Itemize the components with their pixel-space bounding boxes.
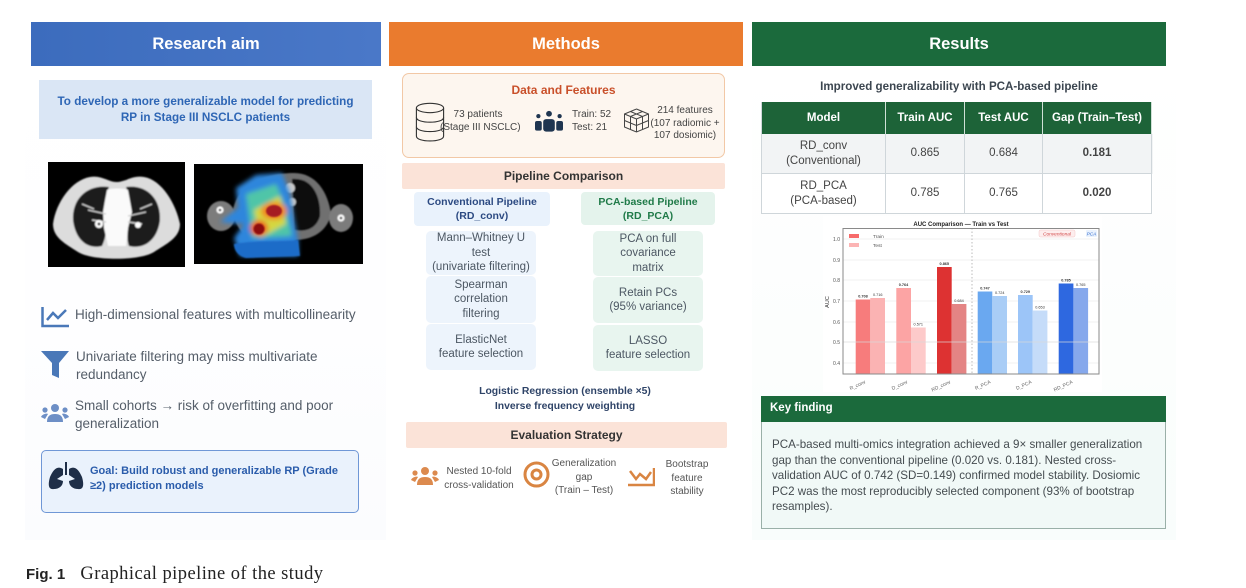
- key finding text: PCA-based multi-omics integration achieved a 9× smaller generalization gap than the conventional pipeline (0.020 vs. 0.181). Nested cross-validation AUC of 0.742 (SD=0.149) confirmed model stability. Dosiomic PC2 was the most reproducibly selected component (93% of bootstrap resamples).: [772, 438, 1142, 513]
- heading: results: Results: [929, 34, 989, 52]
- text: bootstrap stability: feature: [671, 472, 703, 484]
- table row: RD_PCA: 0.020: [1083, 187, 1111, 199]
- text: small cohorts: Small cohorts → risk of overfitting and poor generalization: [75, 398, 333, 431]
- icon: lungs: [48, 462, 84, 490]
- heading: research aim: [31, 22, 381, 66]
- bars: conventional models: [856, 267, 966, 374]
- data heading: Data and Features: [511, 83, 616, 97]
- heading: methods: Methods: [532, 34, 600, 52]
- panel: methods: [389, 22, 743, 497]
- classifier text: [479, 386, 651, 412]
- evaluation strategy heading: Evaluation Strategy: [510, 428, 623, 442]
- bars: PCA models: [978, 284, 1088, 374]
- x-axis labels: R_PCA: [974, 379, 992, 392]
- value labels: 0.571: [914, 322, 923, 326]
- chart legend: Train: [873, 234, 884, 240]
- step: ElasticNet: [426, 324, 536, 370]
- icon: funnel: [41, 351, 69, 378]
- text: nested CV: Nested 10-fold: [446, 466, 512, 477]
- conventional pipeline title: (RD_conv): [456, 210, 508, 222]
- patients count: (Stage III NSCLC): [440, 122, 521, 132]
- step: Spearman: filtering: [462, 308, 500, 320]
- table row: RD_PCA: 0.765: [989, 187, 1018, 199]
- patients count: 73 patients: [454, 109, 502, 120]
- patients count: [440, 109, 521, 132]
- y-axis labels: 0.7: [833, 299, 840, 305]
- table row: RD_conv: (Conventional): [786, 154, 861, 166]
- key finding heading: Key finding: [770, 402, 833, 414]
- text: univariate filtering: Univariate filtering may miss multivariate redundancy: [76, 349, 318, 382]
- table row: RD_conv: 0.684: [989, 147, 1018, 159]
- comparison table: [761, 102, 1152, 214]
- heading: research aim: Research aim: [152, 34, 260, 52]
- conventional pipeline title: [414, 192, 550, 226]
- table row: RD_conv: 0.865: [911, 147, 939, 159]
- feature counts: 214 features: [657, 105, 713, 116]
- x-axis labels: D_conv: [891, 379, 909, 392]
- feature counts: [650, 105, 720, 141]
- value labels: [858, 262, 1085, 326]
- goal callout: [41, 450, 359, 513]
- panel: results: [752, 22, 1166, 214]
- table row: RD_conv: RD_conv: [800, 140, 847, 152]
- value labels: 0.653: [1035, 306, 1045, 310]
- background: results panel: [752, 66, 1176, 540]
- step: PCA: covariance: [620, 247, 676, 259]
- classifier text: Inverse frequency weighting: [495, 400, 635, 412]
- step: Mann-Whitney: [426, 231, 536, 275]
- y-axis labels: 1.0: [833, 237, 840, 243]
- table row: RD_conv: 0.181: [1083, 147, 1111, 159]
- y-axis labels: 0.6: [833, 320, 840, 326]
- data and features card: [402, 73, 725, 158]
- icon: feature cube: [624, 108, 649, 132]
- table row: RD_PCA: [762, 174, 1153, 214]
- text: high-dimensional features: High-dimensional features with multicollinearity: [75, 307, 356, 322]
- icon: people: [41, 404, 69, 422]
- text: generalization gap: (Train – Test): [555, 485, 613, 496]
- value labels: 0.865: [940, 262, 949, 266]
- group tags: [1039, 230, 1097, 238]
- table header row: Test AUC: [978, 112, 1029, 124]
- text: generalization gap: gap: [576, 472, 592, 482]
- PCA pipeline column: [581, 192, 715, 371]
- y-axis labels: [833, 237, 840, 367]
- icon: chart: [41, 307, 69, 328]
- results subtitle: Improved generalizability with PCA-based pipeline: [820, 80, 1098, 93]
- figure caption: Fig. 1 Graphical pipeline of the study: [26, 564, 323, 584]
- text: generalization gap: Generalization: [552, 458, 616, 469]
- step: retain PCs: Retain PCs: [619, 286, 677, 298]
- table row: RD_PCA: RD_PCA: [800, 180, 847, 192]
- train and test counts: Train: 52: [572, 109, 611, 120]
- table row: RD_conv: [762, 134, 1153, 174]
- text: nested CV: cross-validation: [444, 480, 514, 490]
- text: bootstrap stability: stability: [670, 486, 704, 497]
- pipeline comparison heading: Pipeline Comparison: [504, 169, 623, 183]
- icon: stability chart: [628, 468, 655, 486]
- text: bootstrap stability: Bootstrap: [666, 459, 708, 470]
- step: ElasticNet: ElasticNet: [455, 334, 507, 346]
- goal text: Goal: Build robust and generalizable RP (Grade ≥2) prediction models: [90, 465, 338, 492]
- train and test counts: Test: 21: [572, 122, 607, 133]
- conventional pipeline title: Conventional Pipeline: [427, 196, 537, 208]
- aim statement: [39, 80, 372, 139]
- step: LASSO: [593, 325, 703, 371]
- key finding heading: [761, 396, 1166, 422]
- step: PCA: PCA on full: [620, 233, 676, 245]
- value labels: 0.747: [980, 286, 990, 290]
- chart legend: Test: [873, 243, 882, 249]
- text: bootstrap stability: [666, 459, 708, 497]
- y-axis labels: 0.5: [833, 340, 840, 346]
- y-axis labels: 0.9: [833, 258, 840, 264]
- table row: RD_PCA: (PCA-based): [790, 194, 857, 206]
- key finding card: [761, 396, 1166, 529]
- step: PCA: [593, 231, 703, 276]
- step: LASSO: feature selection: [606, 349, 690, 361]
- value labels: 0.785: [1061, 278, 1071, 282]
- PCA pipeline title: PCA-based Pipeline: [598, 196, 698, 208]
- image: dose overlay on CT: [194, 164, 363, 264]
- bar chart: AUC comparison: [825, 222, 1100, 392]
- pipeline comparison heading: [402, 163, 725, 189]
- chart legend: [849, 234, 884, 249]
- panel: research aim: [31, 22, 381, 513]
- x-axis labels: [849, 379, 1074, 394]
- aim statement: To develop a more generalizable model for predicting RP in Stage III NSCLC patients: [58, 95, 353, 124]
- table header row: [762, 102, 1152, 134]
- value labels: 0.708: [858, 294, 868, 298]
- value labels: 0.765: [1076, 283, 1085, 287]
- table header row: Train AUC: [897, 112, 953, 124]
- feature counts: 107 dosiomic): [654, 130, 716, 141]
- y-axis labels: 0.8: [833, 278, 840, 284]
- heading: results: [752, 22, 1166, 66]
- icon: database: [416, 102, 444, 142]
- text: generalization gap: [552, 458, 616, 496]
- icon: target: [524, 462, 550, 488]
- train and test counts: [572, 109, 611, 133]
- group tags: Conventional: [1043, 232, 1072, 238]
- x-axis labels: D_PCA: [1015, 379, 1033, 392]
- value labels: 0.764: [899, 283, 909, 287]
- PCA pipeline title: [581, 192, 715, 225]
- step: Spearman: [426, 276, 536, 323]
- table header row: Gap (Train–Test): [1052, 112, 1142, 124]
- heading: methods: [389, 22, 743, 66]
- step: Spearman: Spearman: [454, 279, 508, 291]
- step: Mann-Whitney: Mann–Whitney U: [437, 232, 525, 244]
- feature counts: (107 radiomic +: [650, 118, 720, 128]
- group tags: PCA: [1087, 232, 1096, 238]
- table header row: Model: [807, 112, 840, 124]
- evaluation strategy heading: [406, 422, 727, 448]
- value labels: 0.684: [954, 299, 964, 303]
- PCA pipeline title: (RD_PCA): [623, 210, 673, 222]
- value labels: 0.716: [873, 293, 882, 297]
- text: nested CV: [444, 466, 514, 490]
- step: ElasticNet: feature selection: [439, 348, 523, 360]
- x-axis labels: R_conv: [849, 379, 867, 392]
- value labels: 0.724: [995, 291, 1004, 295]
- background: research aim panel: [25, 66, 386, 540]
- y-axis title: AUC: [825, 296, 831, 308]
- step: Mann-Whitney: (univariate filtering): [432, 261, 530, 273]
- step: LASSO: LASSO: [629, 334, 667, 346]
- icon: people orange: [411, 467, 439, 485]
- step: retain PCs: (95% variance): [609, 301, 687, 313]
- icon: team: [535, 110, 563, 132]
- step: retain PCs: [593, 277, 703, 323]
- step: Mann-Whitney: test: [472, 247, 490, 259]
- value labels: 0.729: [1021, 290, 1030, 294]
- step: PCA: matrix: [632, 262, 664, 274]
- image: chest CT scan: [48, 162, 185, 267]
- classifier text: Logistic Regression (ensemble ×5): [479, 386, 651, 397]
- chart title: AUC Comparison — Train vs Test: [913, 222, 1009, 228]
- conventional pipeline column: [414, 192, 550, 370]
- y-axis labels: 0.4: [833, 361, 840, 367]
- table row: RD_PCA: 0.785: [911, 187, 939, 199]
- step: Spearman: correlation: [454, 293, 508, 305]
